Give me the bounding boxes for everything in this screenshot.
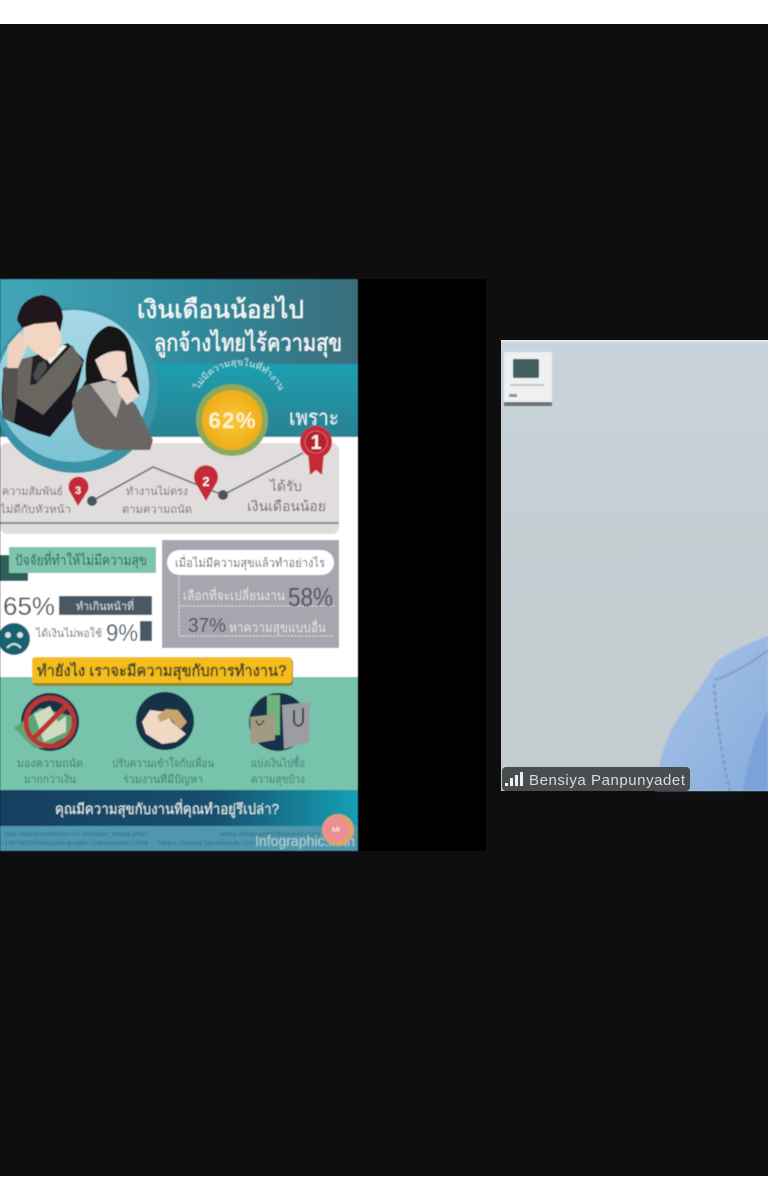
tip 3 text [251, 755, 305, 786]
icon: sad face [0, 623, 30, 655]
title: ลูกจ้างไทยไร้ความสุข [154, 329, 342, 358]
panel: reasons ranking background [0, 443, 339, 534]
bar: 9 percent not enough money [35, 620, 152, 647]
bar: 9 percent not enough money: ได้เงินไม่พอใช้ [35, 627, 102, 640]
label: because: เพราะ [289, 405, 339, 430]
footer: sources [0, 826, 358, 851]
footer: sources: https://www.facebook.com [158, 840, 258, 847]
name tag: Bensiya Panpunyadet [529, 772, 686, 789]
panel: what people do when unhappy: เมื่อไม่มีความสุขแล้วทำอย่างไร [175, 554, 326, 571]
bar: 65 percent overwork: 65% [3, 593, 55, 621]
footer: sources: =1467902098&grpid=&catid=19&subcatid=1904 [0, 840, 148, 847]
reason 2: pin and mismatched job [122, 465, 218, 516]
icon: shopping bags [249, 693, 310, 751]
banner: how to be happy at work [32, 657, 293, 686]
reason 1: ribbon and low salary: ได้รับ [269, 478, 302, 494]
illustration: stressed couple [0, 295, 158, 473]
stat: change job 58 percent [183, 582, 333, 612]
bar: 9 percent not enough money: 9% [106, 620, 138, 647]
panel: webcam video [501, 340, 768, 791]
reason 1: ribbon and low salary: 1 [310, 432, 322, 454]
tip 2 text: ปรับความเข้าใจกับเพื่อน [112, 755, 214, 770]
icon: no money [14, 693, 79, 751]
tip 3 text: แบ่งเงินไปซื้อ [251, 755, 305, 770]
panel: what people do when unhappy [162, 540, 339, 648]
tip 3 text: ความสุขบ้าง [251, 774, 305, 786]
reason 2: pin and mismatched job: 2 [202, 474, 210, 489]
panel: header band [0, 279, 358, 437]
stat: change job 58 percent: 58% [288, 582, 333, 612]
footer: sources: http://www.matichon.co.th/news_detail.php? [4, 831, 149, 838]
stat: other happiness 37 percent: หาความสุขแบบอื่น [229, 619, 326, 636]
reason 3: pin and bad relationship: ไม่ดีกับหัวหน้า [0, 503, 71, 516]
bar: 65 percent overwork: ทำเกินหน้าที่ [76, 598, 134, 613]
badge: 62 percent unhappy: ไม่มีความสุขในที่ทำงาน [191, 357, 284, 392]
panel: green tips section [0, 677, 358, 790]
bar: 65 percent overwork [3, 593, 152, 621]
chart: ranked reasons line [87, 453, 303, 506]
tip 2 text [112, 755, 214, 786]
badge: 62 percent unhappy: 62% [208, 408, 256, 433]
tip 2 text: ร่วมงานที่มีปัญหา [123, 771, 203, 786]
reason 3: pin and bad relationship [0, 477, 88, 516]
reason 2: pin and mismatched job: ตามความถนัด [122, 504, 192, 516]
reason 3: pin and bad relationship: 3 [75, 485, 81, 497]
reason 3: pin and bad relationship: ความสัมพันธ์ [2, 485, 63, 498]
logo: round stamp: MI [332, 827, 340, 834]
banner: closing question [0, 790, 358, 826]
panel: infographic [0, 278, 359, 852]
banner: closing question: คุณมีความสุขกับงานที่คุณทำอยู่รึเปล่า? [55, 799, 279, 818]
man [2, 343, 84, 437]
icon: handshake [136, 692, 194, 750]
black shared-screen panel [0, 279, 486, 851]
panel: factors heading [0, 547, 156, 581]
logo: round stamp [322, 814, 354, 846]
badge: 62 percent unhappy [191, 357, 284, 456]
reason 2: pin and mismatched job: ทำงานไม่ตรง [126, 485, 188, 498]
banner: how to be happy at work: ทำยังไง เราจะมีความสุขกับการทำงาน? [37, 661, 287, 681]
woman [76, 326, 140, 398]
reason 1: ribbon and low salary [247, 426, 332, 514]
tip 1 text [17, 758, 83, 786]
title: เงินเดือนน้อยไป [137, 295, 304, 324]
tip 1 text: มองความถนัด [17, 758, 83, 770]
stat: other happiness 37 percent: 37% [188, 615, 226, 637]
icon: wall thermostat [504, 352, 552, 406]
stat: other happiness 37 percent [188, 615, 326, 637]
stat: change job 58 percent: เลือกที่จะเปลี่ยนงาน [183, 587, 285, 603]
name tag [502, 767, 690, 791]
title [137, 295, 342, 358]
reason 1: ribbon and low salary: เงินเดือนน้อย [247, 498, 326, 514]
tip 1 text: มากกว่าเงิน [24, 774, 76, 786]
footer: sources: Infographic.in.th [255, 833, 355, 850]
panel: factors heading: ปัจจัยที่ทำให้ไม่มีความสุข [15, 551, 147, 569]
icon: signal bars [505, 772, 523, 786]
footer: sources: www.infographicthailand.com [219, 831, 320, 838]
person: blue shirt shoulder [655, 636, 768, 791]
